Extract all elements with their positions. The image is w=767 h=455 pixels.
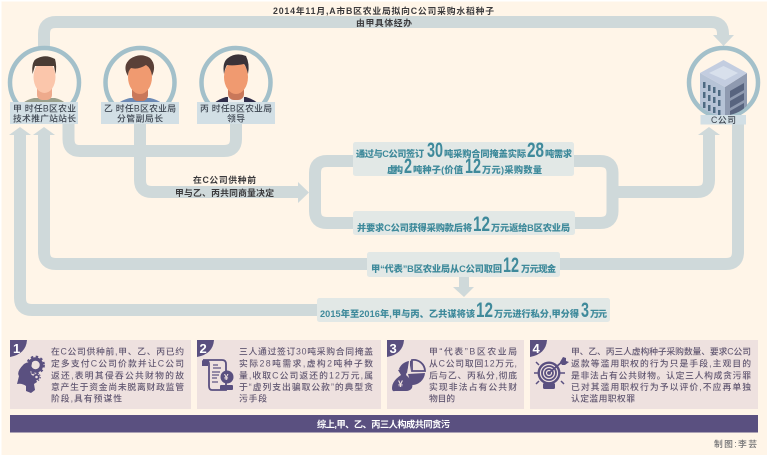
icon: money bag with pie chart: ¥ xyxy=(398,379,403,389)
panel 4 xyxy=(530,340,758,409)
panel 2 xyxy=(197,340,381,409)
label: 乙: 分管副局长 xyxy=(117,112,163,124)
panel 2 text: 三人通过签订30吨采购合同掩盖 xyxy=(239,346,373,356)
portrait: 乙 xyxy=(103,46,177,102)
panel 3 text: 实现非法占有公共财 xyxy=(429,381,517,392)
box: private split: 12 xyxy=(476,299,493,322)
box: fake contract: 2 xyxy=(404,155,412,178)
flow arrow: cash collected xyxy=(33,122,738,264)
panel 1 text: 返还,表明其侵吞公共财物的故 xyxy=(51,370,184,380)
box: collect cash: 甲“代表”B区农业局从C公司取回 xyxy=(371,263,502,274)
badge 4 xyxy=(530,340,547,357)
text: before supply: 在C公司供种前 xyxy=(193,174,256,185)
panel 4 text: 是非法占有公共财物。认定三人构成贪污罪 xyxy=(571,370,751,380)
flow loop: purchase scheme xyxy=(315,127,720,223)
panel 3 text: 物目的 xyxy=(429,392,455,404)
box: fake contract: 吨种子(价值 xyxy=(413,164,463,175)
label: C公司: C公司 xyxy=(711,115,736,125)
subtitle: handled by 甲: 由甲具体经办 xyxy=(356,17,412,28)
flow arrow: 甲乙丙 joint decision xyxy=(68,120,309,203)
box: fake contract: 吨采购合同掩盖实际 xyxy=(444,148,527,159)
conclusion bar: 综上,甲、乙、丙三人构成共同贪污 xyxy=(317,418,450,430)
badge 1 xyxy=(10,340,27,357)
box: private split xyxy=(317,298,610,322)
icon: C公司 building xyxy=(689,48,758,120)
panel 1 xyxy=(10,340,191,409)
box: collect cash xyxy=(367,252,560,277)
badge 2: 2 xyxy=(200,341,207,356)
box: fake contract xyxy=(353,139,574,178)
panel 3 xyxy=(387,340,524,409)
panel 3 text: 从C公司取回12万元, xyxy=(429,358,517,368)
panel 3 text: 后与乙、丙私分,彻底 xyxy=(429,370,517,380)
panel 3 text: 甲“代表”B区农业局 xyxy=(429,346,517,356)
panel 3 text xyxy=(429,346,517,404)
portrait: 丙 xyxy=(199,46,273,102)
box: private split: 万元 xyxy=(590,309,607,319)
panel 2 text: 污手段 xyxy=(239,392,267,404)
label: 甲: 甲 时任B区农业 xyxy=(13,102,76,114)
panel 4 text: 认定滥用职权罪 xyxy=(571,392,635,404)
label: 丙 xyxy=(197,102,275,124)
panel 2 text: 量,收取C公司返还的12万元,属 xyxy=(239,370,373,380)
portrait: 甲 xyxy=(8,46,82,102)
box: private split: 万元进行私分,甲分得 xyxy=(494,308,579,319)
box: private split: 2015年至2016年,甲与丙、乙共谋将该 xyxy=(320,308,475,319)
badge 3: 3 xyxy=(390,341,397,356)
panel 2 text xyxy=(239,346,373,404)
panel 1 text xyxy=(51,346,184,404)
box: return money: 并要求C公司获得采购款后将 xyxy=(357,222,472,233)
panel 1 text: 阶段,具有预谋性 xyxy=(51,392,122,404)
label: 丙: 领导 xyxy=(227,112,245,124)
panel 2 text: 实际28吨需求,虚构2吨种子数 xyxy=(239,358,373,368)
credit: 制图:李芸 xyxy=(714,438,757,449)
box: collect cash: 万元现金 xyxy=(521,263,557,274)
title: 2014年11月,A市B区农业局拟向C公司采购水稻种子 xyxy=(273,5,494,16)
badge 2 xyxy=(197,340,214,357)
box: return money xyxy=(353,211,575,236)
panel 2 text: 于“虚列支出骗取公款”的典型贪 xyxy=(239,381,373,392)
flow arrow: private split xyxy=(9,127,325,310)
icon: scroll with yuan coin: ¥ xyxy=(224,373,229,382)
panel 4 text: 已对其滥用职权行为予以评价,不应再单独 xyxy=(571,381,751,392)
box: return money: 12 xyxy=(473,213,490,236)
label: C公司 xyxy=(700,115,746,125)
box: fake contract: 30 xyxy=(427,139,443,162)
box: fake contract: 通过与C公司签订 xyxy=(356,148,424,159)
icon: light bulb with target xyxy=(534,357,569,389)
panel 1 text: 在C公司供种前,甲、乙、丙已约 xyxy=(51,346,184,356)
box: collect cash: 12 xyxy=(503,254,519,277)
badge 4: 4 xyxy=(532,341,540,356)
badge 1: 1 xyxy=(13,341,20,356)
box: fake contract: 12 xyxy=(465,155,481,178)
panel 4 text: 返款等滥用职权的行为只是手段,主观目的 xyxy=(571,358,751,368)
label: 丙: 丙 时任B区农业局 xyxy=(200,102,272,114)
label: 甲: 技术推广站站长 xyxy=(13,112,76,124)
panel 4 text xyxy=(571,346,751,404)
conclusion bar xyxy=(10,415,758,432)
label: 乙 xyxy=(101,102,179,124)
box: private split: 3 xyxy=(581,299,589,322)
icon: scroll with yuan coin xyxy=(202,360,234,390)
icon: head with gears xyxy=(17,356,44,393)
box: fake contract: 28 xyxy=(527,139,544,162)
box: fake contract: 虚构 xyxy=(387,164,403,175)
box: return money: 万元返给B区农业局 xyxy=(491,222,570,233)
panel 1 text: 意产生于资金尚未脱离财政监管 xyxy=(51,381,184,392)
arrow: cash to split xyxy=(453,277,474,297)
label: 甲 xyxy=(10,102,78,124)
panel 1 text: 定多支付C公司价款并让C公司 xyxy=(51,358,184,368)
panel 4 text: 甲、乙、丙三人虚构种子采购数量、要求C公司 xyxy=(571,346,751,356)
box: fake contract: 万元)采购数量 xyxy=(482,164,542,175)
label: 乙: 乙 时任B区农业局 xyxy=(104,102,176,114)
text: joint decision: 甲与乙、丙共同商量决定 xyxy=(175,187,274,198)
box: fake contract: 吨需求 xyxy=(545,148,572,159)
flow arrow: A市B区农业局 to C公司 xyxy=(44,22,734,50)
